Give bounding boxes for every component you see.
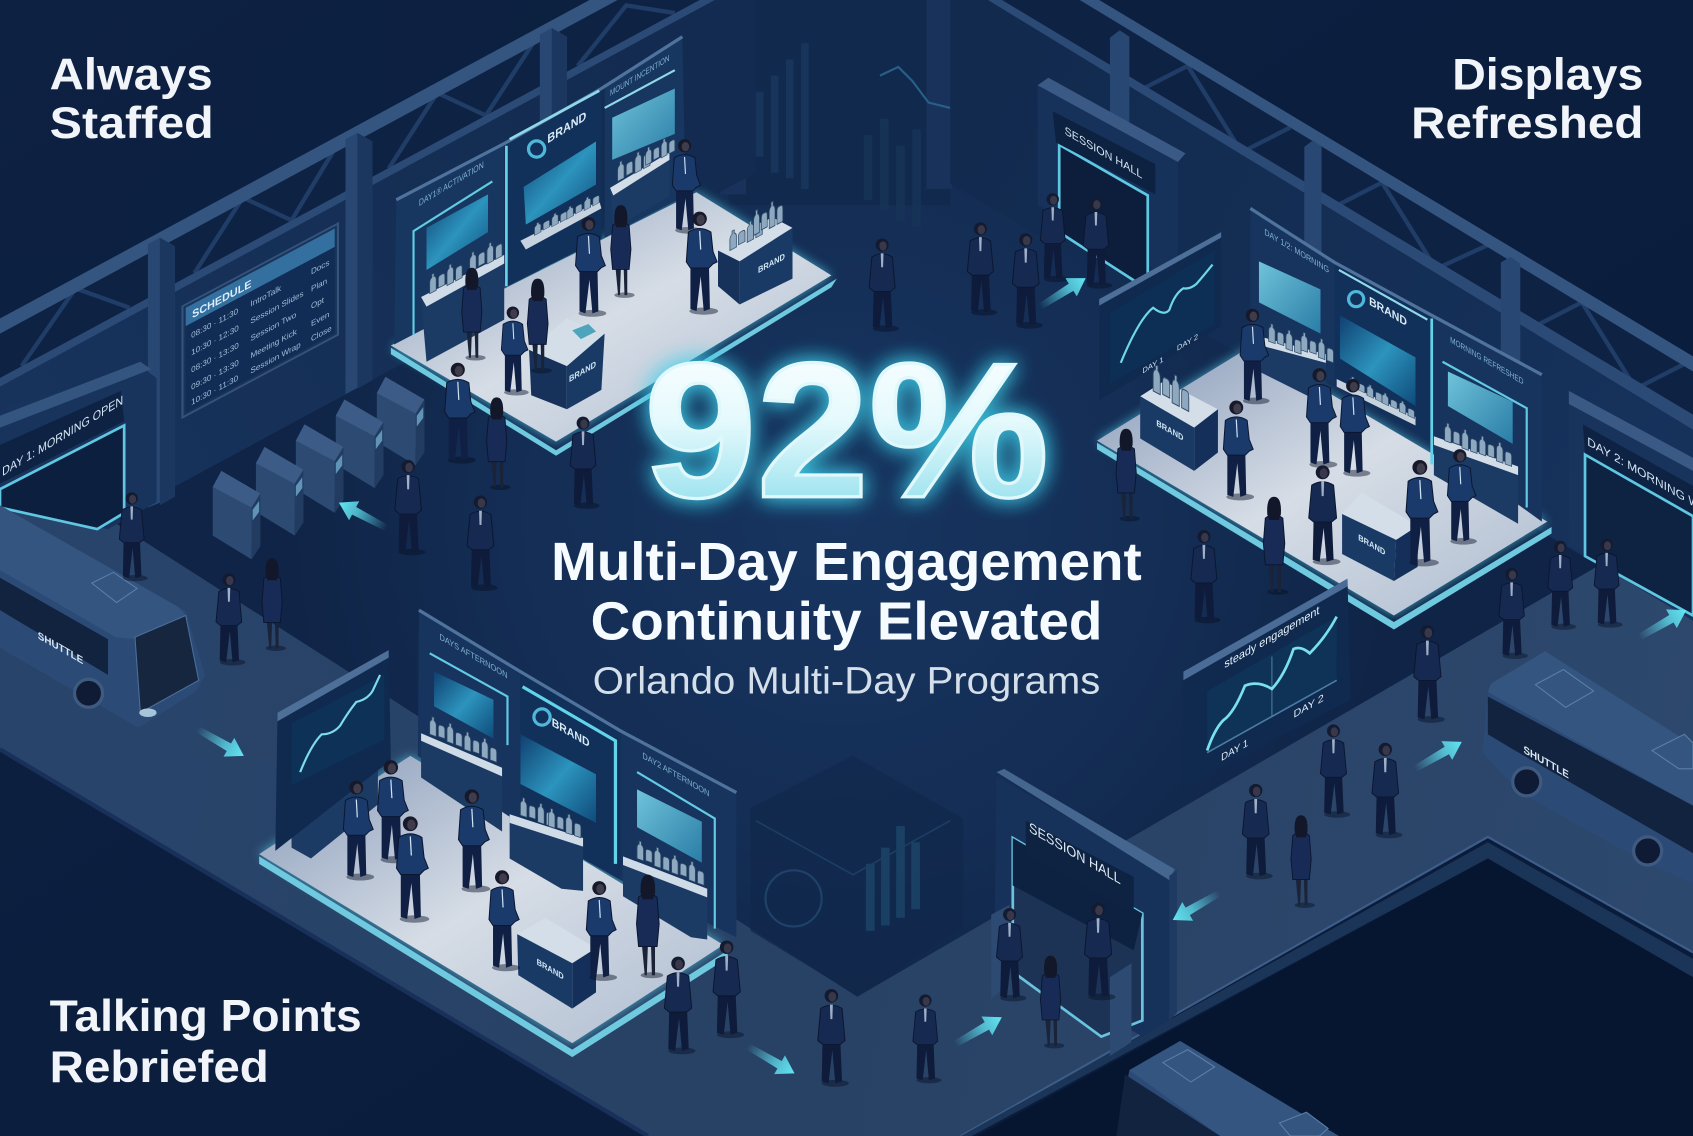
booth 1 back panels bbox=[394, 37, 686, 344]
booth 3 desk bbox=[517, 918, 596, 1009]
door: session hall bottom bbox=[991, 769, 1177, 1056]
booth 1 centre desk: BRAND bbox=[569, 359, 596, 384]
booth 2 labels: MORNING REFRESHED bbox=[1450, 335, 1524, 387]
door: session hall top bbox=[1038, 78, 1186, 289]
schedule board: 08:30 · 11:30 bbox=[191, 306, 238, 340]
bus: left shuttle bbox=[0, 505, 205, 728]
bus: bottom shuttle bbox=[1116, 1041, 1339, 1136]
booth 1 labels: DAY1® ACTIVATION bbox=[419, 160, 484, 209]
label: always staffed bbox=[50, 51, 214, 148]
panel: booth 2 bbox=[1097, 208, 1552, 630]
booth 3 shelves bbox=[292, 716, 707, 939]
booth 1 labels: BRAND bbox=[547, 108, 586, 146]
schedule board: 10:30 · 11:30 bbox=[191, 373, 238, 407]
booth 2 back panels bbox=[1250, 208, 1542, 522]
schedule board: SCHEDULE bbox=[192, 278, 252, 321]
title bbox=[551, 532, 1142, 651]
booth 2 staff bbox=[1116, 309, 1477, 595]
schedule board: Plan bbox=[311, 276, 327, 294]
schedule board: 09:30 · 13:30 bbox=[191, 357, 239, 392]
booth 2 labels: DAY 1/2: MORNING bbox=[1264, 227, 1329, 275]
label: displays refreshed bbox=[1411, 51, 1643, 148]
label: displays refreshed: Refreshed bbox=[1411, 99, 1643, 148]
booth 3 labels: BRAND bbox=[552, 715, 590, 750]
schedule board: Meeting Kick bbox=[250, 326, 297, 360]
right wall with truss bbox=[950, 0, 1693, 621]
schedule board: Close bbox=[311, 323, 332, 343]
booth 2 labels bbox=[1264, 227, 1524, 387]
booth 2 screens bbox=[1259, 261, 1513, 444]
chart: steady engagement: DAY 1 bbox=[1221, 737, 1248, 764]
booth 3 standalone chart bbox=[275, 650, 391, 851]
booth 1 labels: MOUNT INCENTION bbox=[610, 53, 669, 98]
schedule board: 08:30 · 13:30 bbox=[191, 340, 239, 375]
bus: left shuttle: SHUTTLE bbox=[38, 630, 83, 667]
bus: right shuttle: SHUTTLE bbox=[1523, 743, 1569, 782]
booth 1 screens bbox=[426, 89, 675, 270]
title: Multi-Day Engagement bbox=[551, 532, 1142, 592]
booth 1 labels bbox=[419, 53, 669, 209]
booth 3 back panels bbox=[418, 610, 736, 937]
booth 2 shelves bbox=[1261, 323, 1518, 524]
booth 2 standalone chart bbox=[1099, 232, 1221, 401]
chart: steady engagement: steady engagement bbox=[1224, 602, 1320, 671]
schedule board: Session Slides bbox=[250, 288, 304, 326]
booth 1 staff bbox=[462, 139, 718, 395]
label: talking points rebriefed: Rebriefed bbox=[50, 1043, 269, 1092]
booth 1 shelves bbox=[421, 133, 675, 362]
lower hologram data panel bbox=[750, 756, 963, 996]
door: day 2 morning walk bbox=[1569, 391, 1693, 621]
door: day 1 morning open: DAY 1: MORNING OPEN bbox=[2, 392, 123, 479]
schedule board: Docs bbox=[311, 257, 330, 277]
subtitle: Orlando Multi-Day Programs bbox=[593, 660, 1100, 702]
door: session hall top: SESSION HALL bbox=[1065, 124, 1143, 182]
label: always staffed: Always bbox=[50, 51, 213, 100]
chart: steady engagement bbox=[1183, 579, 1351, 787]
turnstiles bbox=[213, 377, 424, 559]
left wall with truss bbox=[0, 0, 756, 581]
booth 1 centre desk bbox=[529, 319, 605, 409]
people: attendees walking bbox=[119, 193, 1623, 1087]
schedule board: Even bbox=[311, 309, 330, 328]
booth 1 right table bbox=[718, 196, 793, 305]
schedule board bbox=[182, 224, 338, 417]
bus: right shuttle bbox=[1482, 651, 1693, 883]
schedule board: Session Two bbox=[250, 309, 296, 343]
panel: booth 3 bbox=[259, 610, 736, 1057]
booth 2 left table bbox=[1140, 363, 1218, 471]
schedule board: Session Wrap bbox=[250, 339, 301, 376]
back wall with dim charts bbox=[720, 0, 999, 227]
schedule board: IntroTalk bbox=[250, 283, 282, 309]
schedule board: 10:30 · 12:30 bbox=[191, 323, 239, 358]
booth 2 labels: BRAND bbox=[1369, 293, 1407, 329]
booth 3 staff bbox=[343, 760, 663, 981]
booth 3 labels bbox=[439, 632, 709, 799]
title: Continuity Elevated bbox=[591, 591, 1102, 651]
booth 1 right table: BRAND bbox=[758, 251, 785, 275]
door: day 1 morning open bbox=[0, 362, 157, 529]
booth 2 standalone chart: DAY 1 bbox=[1142, 355, 1164, 375]
schedule board: Opt bbox=[311, 294, 325, 311]
booth 3 desk: BRAND bbox=[537, 957, 564, 982]
label: talking points rebriefed: Talking Points bbox=[50, 992, 362, 1041]
booth 2 left table: BRAND bbox=[1156, 418, 1184, 443]
booth 3 screens bbox=[434, 672, 702, 863]
panel: booth 1 bbox=[391, 37, 837, 456]
walkway bbox=[0, 449, 1693, 1136]
headline stat: 92%: 92% bbox=[644, 323, 1049, 538]
lower-right void bbox=[977, 858, 1693, 1136]
label: displays refreshed: Displays bbox=[1452, 51, 1643, 100]
label: always staffed: Staffed bbox=[50, 99, 214, 148]
booth 3 labels: DAY2 AFTERNOON bbox=[642, 751, 709, 799]
label: talking points rebriefed bbox=[50, 992, 362, 1092]
booth 2 desk bbox=[1342, 492, 1418, 581]
booth 3 labels: DAYS AFTERNOON bbox=[439, 632, 507, 680]
arrows: flow direction bbox=[192, 269, 1692, 1083]
chart: steady engagement: DAY 2 bbox=[1294, 692, 1324, 721]
booth 2 standalone chart: DAY 2 bbox=[1177, 332, 1198, 353]
booth 2 desk: BRAND bbox=[1358, 533, 1385, 557]
door: session hall bottom: SESSION HALL bbox=[1029, 819, 1121, 888]
